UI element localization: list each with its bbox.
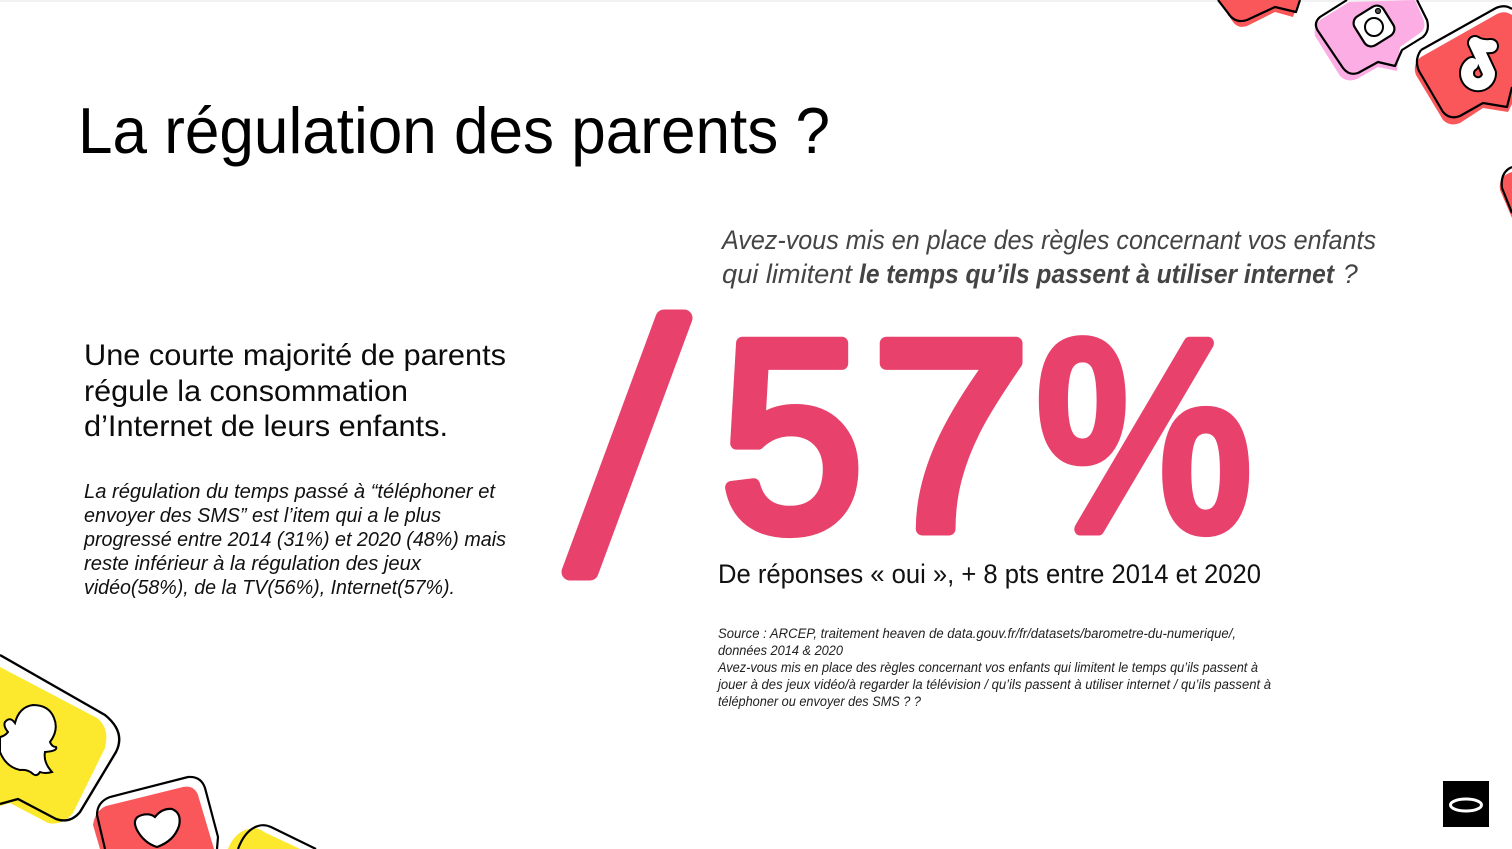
text block: italic detail: vidéo(58%), de la TV(56%), Internet(57%). [84, 576, 455, 599]
icon: snapchat bubble [0, 655, 119, 824]
icon: decorative slash [570, 318, 684, 572]
survey question: ? [1343, 259, 1358, 289]
text block: main statement: Une courte majorité de parents [84, 339, 506, 372]
text block: italic detail: progressé entre 2014 (31%) et 2020 (48%) mais [83, 528, 506, 551]
text block: italic detail: envoyer des SMS” est l’item qui a le plus [84, 504, 441, 527]
big number: 57%: % [1036, 286, 1252, 587]
survey question [720, 225, 1376, 289]
source note: Source : ARCEP, traitement heaven de data.gouv.fr/fr/datasets/barometre-du-numerique/, [718, 626, 1236, 641]
big number: 57% [721, 286, 1252, 587]
icon: red bubble top [1218, 0, 1300, 27]
text block: italic detail: reste inférieur à la régulation des jeux [84, 552, 422, 575]
icon: heart bubble [93, 777, 218, 849]
icon: tiktok bubble [1415, 6, 1512, 124]
icon: yellow bubble bottom [228, 825, 316, 849]
text block: italic detail [83, 480, 506, 599]
title: La régulation des parents ? [78, 94, 830, 167]
icon: instagram bubble [1315, 0, 1428, 80]
icon: red bubble right edge [1500, 167, 1512, 218]
source note: Avez-vous mis en place des règles concernant vos enfants qui limitent le temps qu’ils passent à [717, 660, 1258, 675]
source note: téléphoner ou envoyer des SMS ? ? [718, 694, 921, 709]
text block: main statement: régule la consommation [84, 375, 408, 408]
survey question: le temps qu’ils passent à utiliser internet [859, 259, 1335, 289]
subtitle: yes answers: De réponses « oui », + 8 pts entre 2014 et 2020 [718, 559, 1261, 589]
text block: main statement: d’Internet de leurs enfants. [84, 410, 448, 443]
source note [716, 626, 1271, 709]
survey question: qui limitent [722, 259, 854, 289]
text block: main statement [84, 339, 506, 443]
source note: jouer à des jeux vidéo/à regarder la télévision / qu’ils passent à utiliser internet / qu’ils passent à [716, 677, 1271, 692]
big number: 57%: 7 [872, 286, 1030, 587]
big number: 57%: 5 [721, 286, 863, 587]
logo [1443, 781, 1489, 827]
survey question: Avez-vous mis en place des règles concernant vos enfants [720, 225, 1376, 255]
text block: italic detail: La régulation du temps passé à “téléphoner et [84, 480, 496, 503]
source note: données 2014 & 2020 [718, 643, 843, 658]
